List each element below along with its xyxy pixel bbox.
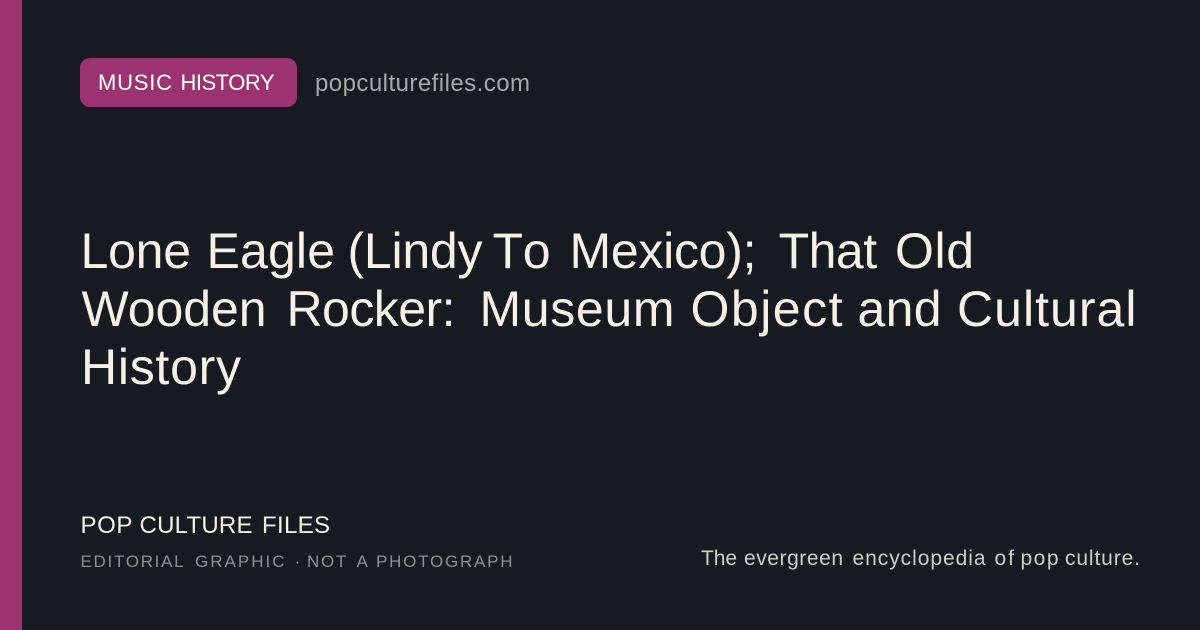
title: Lone <box>80 223 191 279</box>
tagline: culture. <box>1065 547 1140 570</box>
title: History <box>81 339 241 395</box>
tagline: evergreen <box>744 547 843 570</box>
title: Cultural <box>957 281 1136 337</box>
disclaimer: A <box>356 552 368 571</box>
disclaimer: · <box>294 552 300 571</box>
brand name: CULTURE <box>140 512 252 539</box>
disclaimer: GRAPHIC <box>195 552 284 571</box>
disclaimer: EDITORIAL <box>80 552 183 571</box>
title: Mexico); <box>570 223 756 279</box>
title: Wooden <box>82 281 266 337</box>
disclaimer: NOT <box>307 552 346 571</box>
title: (Lindy <box>348 223 482 279</box>
title: Eagle <box>206 223 335 279</box>
title: and <box>858 281 942 337</box>
tagline: The <box>701 547 737 570</box>
accent bar <box>0 0 22 630</box>
category badge: HISTORY <box>180 70 275 95</box>
title: Object <box>690 281 843 337</box>
tagline: encyclopedia <box>852 547 986 570</box>
title: Museum <box>480 281 674 337</box>
title: That <box>779 223 877 279</box>
title: Rocker: <box>286 281 456 337</box>
title <box>80 223 1136 395</box>
title: Old <box>895 223 974 279</box>
category badge: MUSIC <box>98 70 172 95</box>
title: To <box>492 223 550 279</box>
site domain: popculturefiles.com <box>315 70 530 97</box>
tagline: of <box>994 547 1014 570</box>
tagline: pop <box>1020 547 1058 570</box>
disclaimer: PHOTOGRAPH <box>376 552 512 571</box>
category badge <box>80 58 297 107</box>
brand name: POP <box>80 512 132 539</box>
brand name: FILES <box>262 512 330 539</box>
